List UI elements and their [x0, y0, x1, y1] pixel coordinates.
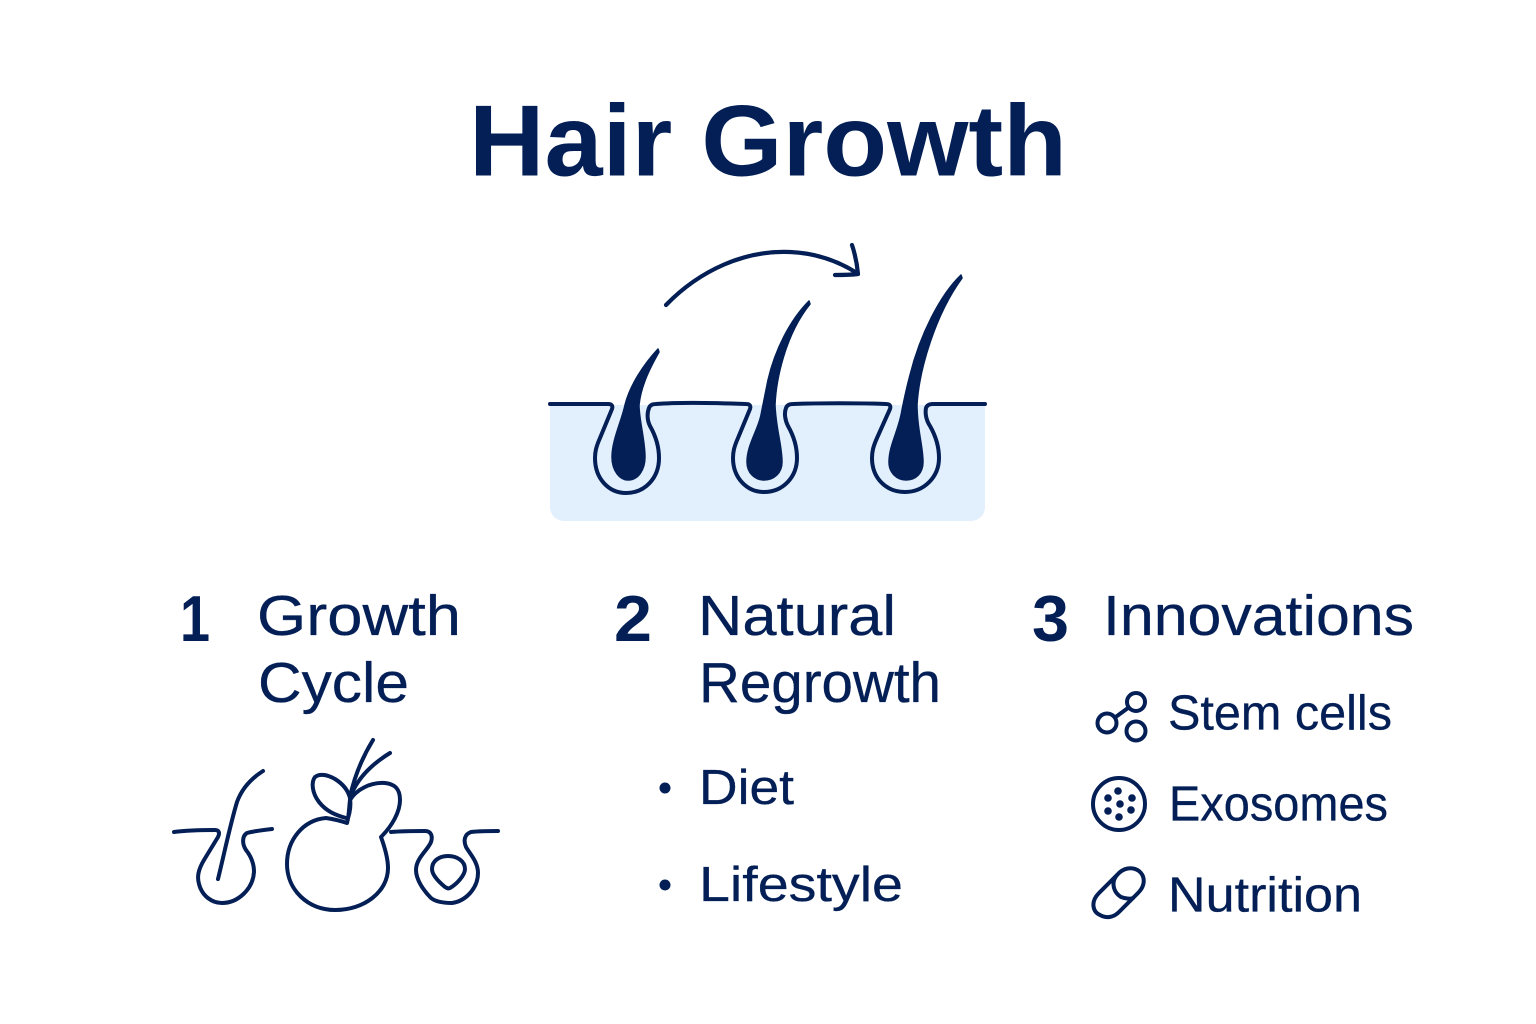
list item: nutrition: [1093, 868, 1362, 922]
icon: right follicle with bulb: [391, 831, 498, 903]
hair: medium: [747, 301, 810, 480]
icon: left follicle with hair: [174, 771, 272, 903]
heading: growth cycle: Cycle: [258, 651, 409, 715]
arrow: growth progression: [666, 245, 858, 305]
column 1: growth cycle: [174, 582, 498, 910]
heading: innovations: Innovations: [1103, 584, 1414, 648]
number 2: 2: [614, 582, 652, 655]
icon: follicle, apple and follicle: [174, 740, 498, 910]
heading: growth cycle: [257, 584, 461, 715]
icon: stem cells: [1098, 693, 1146, 740]
list item: diet: [660, 761, 794, 815]
icon: exosome: [1093, 778, 1145, 830]
hair: short: [612, 349, 659, 480]
title: Hair Growth: [469, 86, 1067, 198]
icon: capsule: [1093, 868, 1144, 917]
skin panel: [550, 405, 985, 521]
column 3: innovations: [1032, 582, 1414, 922]
number 3: 3: [1032, 582, 1069, 655]
hair: long: [889, 275, 962, 480]
list item: lifestyle: Lifestyle: [699, 858, 903, 912]
heading: natural regrowth: [698, 584, 941, 715]
heading: growth cycle: Growth: [257, 584, 461, 648]
list item: nutrition: Nutrition: [1168, 868, 1362, 922]
list item: stem cells: Stem cells: [1168, 686, 1392, 740]
column 2: natural regrowth: [614, 582, 941, 912]
icon: apple: [287, 740, 400, 910]
skin outline with three follicles: [550, 403, 985, 493]
heading: natural regrowth: Natural: [698, 584, 896, 648]
illustration: hair follicle growth stages: [550, 245, 985, 521]
list item: exosomes: Exosomes: [1169, 778, 1388, 832]
number 1: 1: [180, 582, 210, 655]
heading: natural regrowth: Regrowth: [699, 651, 941, 715]
list item: diet: Diet: [699, 761, 794, 815]
